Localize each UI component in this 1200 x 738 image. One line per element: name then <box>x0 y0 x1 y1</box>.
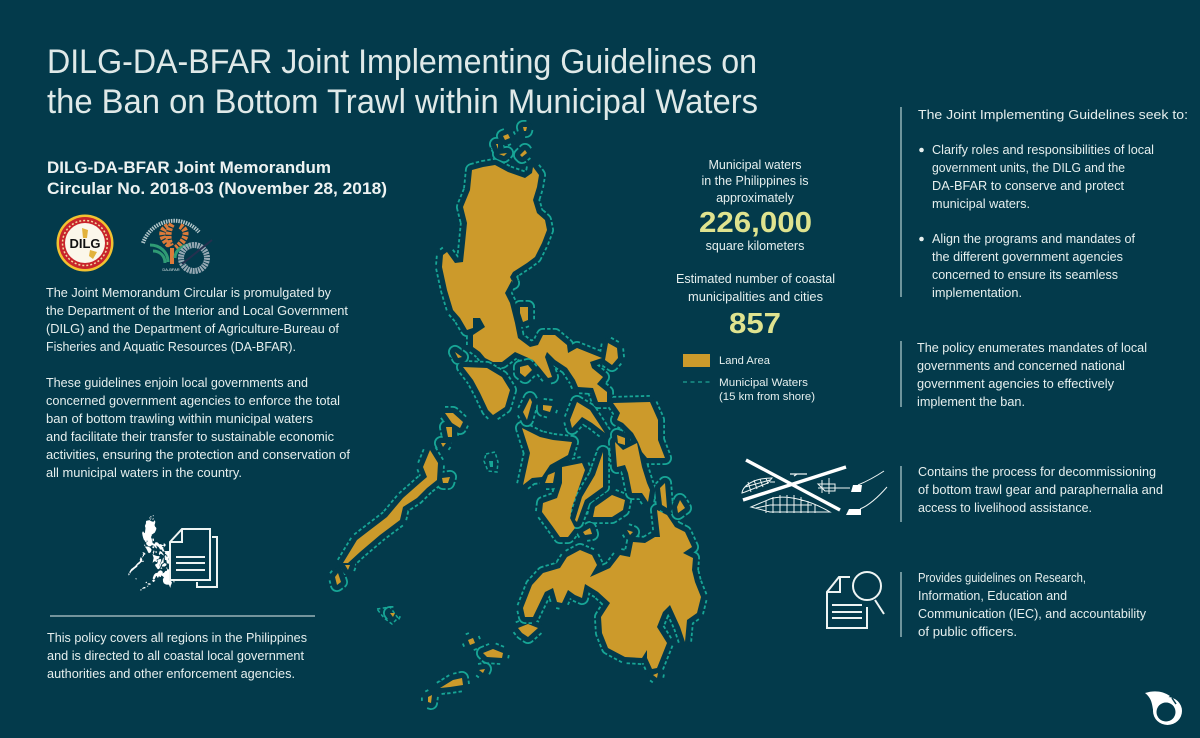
text block: policy coverage: This policy covers all regions in the Philippines <box>47 631 307 645</box>
panel: research and accountability: Information, Education and <box>918 589 1067 603</box>
title <box>47 43 758 121</box>
text block: policy coverage: and is directed to all coastal local government <box>47 649 305 663</box>
panel: guideline objectives: implementation. <box>932 286 1022 300</box>
legend <box>683 354 815 403</box>
panel: policy mandates: The policy enumerates mandates of local <box>917 341 1147 355</box>
text block: guidelines: concerned government agencies to enforce the total <box>46 394 340 408</box>
title: DILG-DA-BFAR Joint Implementing Guidelines on <box>47 43 757 81</box>
stat: coastal municipalities: municipalities and cities <box>688 290 823 304</box>
text block: guidelines: These guidelines enjoin local governments and <box>46 376 308 390</box>
text block: policy coverage: authorities and other enforcement agencies. <box>47 667 295 681</box>
stat: municipal waters area <box>699 158 812 253</box>
legend: Municipal Waters <box>719 377 809 389</box>
legend: Land Area <box>719 355 771 367</box>
text block: circular intro: Fisheries and Aquatic Resources (DA-BFAR). <box>46 340 296 354</box>
panel: research and accountability: Communication (IEC), and accountability <box>918 607 1147 621</box>
icon: crossed-out bottom trawl gear <box>742 460 887 515</box>
panel: guideline objectives: government units, the DILG and the <box>932 161 1125 175</box>
stat: municipal waters area: square kilometers <box>706 239 804 253</box>
panel: guideline objectives: Align the programs and mandates of <box>932 232 1136 246</box>
panel: research and accountability: of public officers. <box>918 625 1017 639</box>
icon: DILG seal: DILG <box>69 236 101 251</box>
icon: Department of Agriculture BFAR seal <box>143 221 212 272</box>
icon: mini Philippines map with documents <box>129 516 217 590</box>
text block: policy coverage <box>47 631 307 681</box>
panel: guideline objectives: concerned to ensure its seamless <box>932 268 1118 282</box>
panel: policy mandates: government agencies to effectively <box>917 377 1115 391</box>
panel: decommissioning process <box>901 465 1163 522</box>
text block: circular intro: The Joint Memorandum Circular is promulgated by <box>46 286 332 300</box>
heading: memorandum circular: Circular No. 2018-03 (November 28, 2018) <box>47 179 387 198</box>
panel: guideline objectives: Clarify roles and responsibilities of local <box>932 143 1154 157</box>
text block: circular intro: the Department of the Interior and Local Government <box>46 304 349 318</box>
heading: memorandum circular <box>47 158 387 198</box>
stat: coastal municipalities <box>676 272 835 340</box>
text block: guidelines: and facilitate their transfer to sustainable economic <box>46 430 334 444</box>
stat: municipal waters area: Municipal waters <box>708 158 802 172</box>
stat: coastal municipalities: Estimated number of coastal <box>676 272 835 286</box>
panel: policy mandates: implement the ban. <box>917 395 1025 409</box>
map: Philippines land area and municipal waters <box>335 127 701 703</box>
panel: decommissioning process: of bottom trawl gear and paraphernalia and <box>918 483 1163 497</box>
stat: municipal waters area: approximately <box>716 191 795 205</box>
text block: circular intro <box>46 286 349 354</box>
panel: guideline objectives: the different government agencies <box>932 250 1123 264</box>
panel: guideline objectives: municipal waters. <box>932 197 1030 211</box>
panel: guideline objectives: DA-BFAR to conserve and protect <box>932 179 1125 193</box>
text block: guidelines <box>46 376 351 480</box>
title: the Ban on Bottom Trawl within Municipal Waters <box>47 83 758 121</box>
stat: municipal waters area: 226,000 <box>699 207 812 239</box>
panel: research and accountability <box>901 571 1147 639</box>
panel: guideline objectives <box>901 107 1188 300</box>
legend: (15 km from shore) <box>719 391 815 403</box>
panel: policy mandates <box>901 341 1147 409</box>
text block: guidelines: all municipal waters in the country. <box>46 466 242 480</box>
panel: decommissioning process: access to livelihood assistance. <box>918 501 1092 515</box>
text block: guidelines: activities, ensuring the protection and conservation of <box>46 448 351 462</box>
icon: document and magnifying glass <box>827 572 884 628</box>
stat: coastal municipalities: 857 <box>729 308 781 340</box>
icon: Department of Agriculture BFAR seal: DA-BFAR <box>162 267 180 272</box>
icon: publisher logo <box>1145 691 1182 725</box>
text block: circular intro: (DILG) and the Department of Agriculture-Bureau of <box>46 322 340 336</box>
panel: research and accountability: Provides guidelines on Research, <box>918 571 1086 585</box>
heading: memorandum circular: DILG-DA-BFAR Joint Memorandum <box>47 158 331 177</box>
stat: municipal waters area: in the Philippines is <box>701 174 809 188</box>
panel: policy mandates: governments and concerned national <box>917 359 1125 373</box>
text block: guidelines: ban of bottom trawling within municipal waters <box>46 412 313 426</box>
panel: guideline objectives: The Joint Implementing Guidelines seek to: <box>918 108 1188 122</box>
panel: decommissioning process: Contains the process for decommissioning <box>918 465 1156 479</box>
icon: DILG seal <box>56 214 114 272</box>
